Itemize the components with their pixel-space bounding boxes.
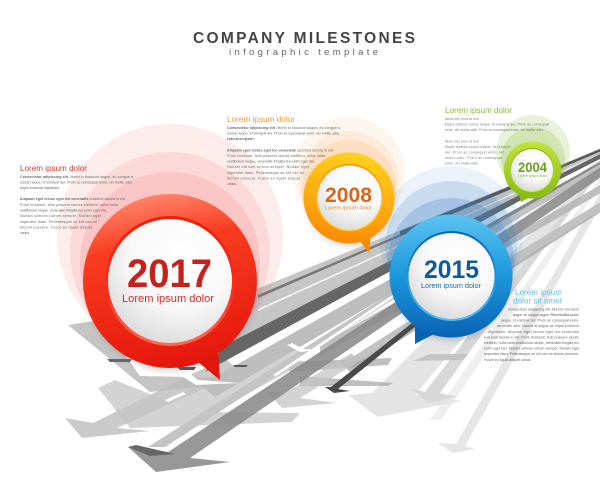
dark small arrow [325,323,416,393]
green text block: Etiam facilisis luctus neque, id volutpat dui. Proin ac consequat [445,122,549,126]
orange text block: vestibulum neque, venenatis fringilla leo enim eget nisi. [227,160,315,164]
strip S1 [320,183,600,356]
orange text block [227,115,340,186]
horizontal barb band [285,358,392,372]
pin: 2017 [83,194,257,380]
band light [235,147,600,340]
fan dark line 2 [420,155,600,250]
arrow left far D [65,358,240,438]
title: COMPANY MILESTONES [193,30,415,47]
green text block: Nunc nec eros ut orci [445,117,479,121]
blue text block: euismod lacinia in elit. Proin tincidunt, felis posuere iaculis [484,335,579,339]
blue text block: Consectetur adipiscing elit. Morbi in tincidunt [508,307,579,311]
halos: orange [293,117,405,234]
pin: 2017: Lorem ipsum dolor [122,293,214,305]
green text block: enim, vel mollis odio. Proin ac consequat enim, vel mollis odio. [445,128,544,132]
arrow C head and shaft [98,345,300,428]
orange text block: Nullam ultrices rutrum semper. Nullam eget [227,165,309,169]
blue text block: imperdiet diam. Pellentesque ac elit nec mi dictum posuere. [484,352,579,356]
arrow barb band right [413,354,468,361]
orange text block: dictum posuere. Fusce eu ligula aliquet [227,176,300,180]
halos: green [496,115,570,191]
red text block [20,164,133,235]
small dark dash right [233,365,248,367]
blue text block: Lorem ipsum [515,288,562,297]
red text block: vestibulum neque, venenatis fringilla leo enim eget nisi. [20,208,107,212]
pale arrow far right [438,186,600,453]
blue text block [484,288,579,362]
small dark dash mid [177,367,196,370]
arrow A light shaft [148,158,600,447]
arrow B head [68,320,240,392]
pin: 2004: Lorem ipsum dolor [518,174,548,178]
green text block: Nunc nec eros ut orci [445,140,479,144]
pin: 2017: 2017 [127,252,212,296]
thin dark line [258,147,600,298]
blue text block: eleifend, nulla nulla vestibulum neque, venenatis fringilla leo [484,341,579,345]
arrow A head shade [128,445,175,456]
green text block: Etiam facilisis luctus neque, id volutpat [445,145,510,149]
red text block: turpis euismod dignissim. [20,186,60,190]
white arrow 2 [287,343,318,352]
pin: 2015: 2015 [424,256,479,284]
white stripe 1 [273,290,402,376]
red text block: Consectetur adipiscing elit. Morbi in tincidunt augue, eu congue a [20,175,133,179]
halos: red [57,124,283,352]
red text block: Nullam ultrices rutrum semper. Nullam eget [20,214,101,218]
blue text block: neque, id volutpat dui. Proin ac consequat enim, [501,318,579,322]
orange text block: Consectetur adipiscing elit. Morbi in tincidunt augue, eu congue a [227,126,340,130]
arrow A dark shaft and head [128,165,600,472]
pale strip right [430,172,600,420]
red text block: dictum posuere. Fusce eu ligula aliquet [20,226,92,230]
orange text block: turpis euismod dignissim. [227,137,255,141]
halos: blue [379,166,523,324]
red text block: imperdiet diam. Pellentesque ac elit nec mi [20,220,97,224]
pin: 2004: 2004 [518,159,547,175]
pin: 2015: Lorem ipsum dolor [421,281,482,290]
red text block: Aliquam eget lectus eget leo venenatis euismod lacinia in elit. [20,197,126,201]
red text block: varius. [20,231,30,235]
red text block: Proin tincidunt, felis posuere iaculis eleifend, nulla nulla [20,203,118,207]
grey band mid [200,160,600,397]
green text block: dui. Proin ac consequat enim, vel [445,150,504,154]
white stripe 3 [165,392,186,402]
fan dark line 1 [400,148,600,236]
orange text block: Aliquam eget lectus eget leo venenatis euismod lacinia in elit. [227,148,334,152]
blue text block: augue, eu congue augue. Etiam facilisis luctus [513,313,579,317]
small pale arrow [410,160,600,403]
blue text block: vel mollis odio. Mauris at augue ac turpis euismod [497,324,579,328]
blue text block: dignissim. Aliquam eget lectus eget leo venenatis [488,330,579,334]
horizontal barb band low [300,376,393,386]
orange text block: luctus neque, id volutpat dui. Proin ac consequat enim, vel mollis odio. [227,131,340,135]
blue text block: Fusce eu ligula aliquet varius. [484,358,532,362]
orange text block: Proin tincidunt, felis posuere iaculis eleifend, nulla nulla [227,154,325,158]
small dark dash left [107,359,132,362]
pin: 2008: Lorem ipsum dolor [325,206,372,212]
pin: 2015 [390,214,513,344]
orange text block: Lorem ipsum dolor [227,115,295,124]
blue text block: enim eget nisi. Nullam ultrices rutrum semper. Nullam eget [484,346,579,350]
dark band [205,152,600,372]
subtitle: infographic template [229,47,378,58]
fan dark line 3 [460,160,600,245]
green text block [445,106,549,166]
pin: 2008: 2008 [325,184,372,207]
white arrow 1 [177,370,240,385]
orange text block: imperdiet diam. Pellentesque ac elit nec mi [227,171,304,175]
green text block: mollis odio. Proin ac consequat [445,156,502,160]
second big arrow [267,200,600,408]
pin: 2004 [504,142,561,202]
white stripe 2 [350,308,423,356]
blue text block: dolor sit amet [513,296,563,306]
red text block: luctus neque, id volutpat dui. Proin ac consequat enim, vel mollis odio. [20,180,133,184]
road with arrows [65,147,600,472]
strip S2 [340,200,600,372]
red text block: Lorem ipsum dolor [20,164,87,173]
green text block: Lorem ipsum dolor [445,106,512,115]
orange text block: varius. [227,182,237,186]
big pale arrow [348,160,600,417]
green text block: enim, vel mollis odio. [445,162,479,166]
thin white line [258,152,600,311]
pin: 2008 [304,152,395,253]
